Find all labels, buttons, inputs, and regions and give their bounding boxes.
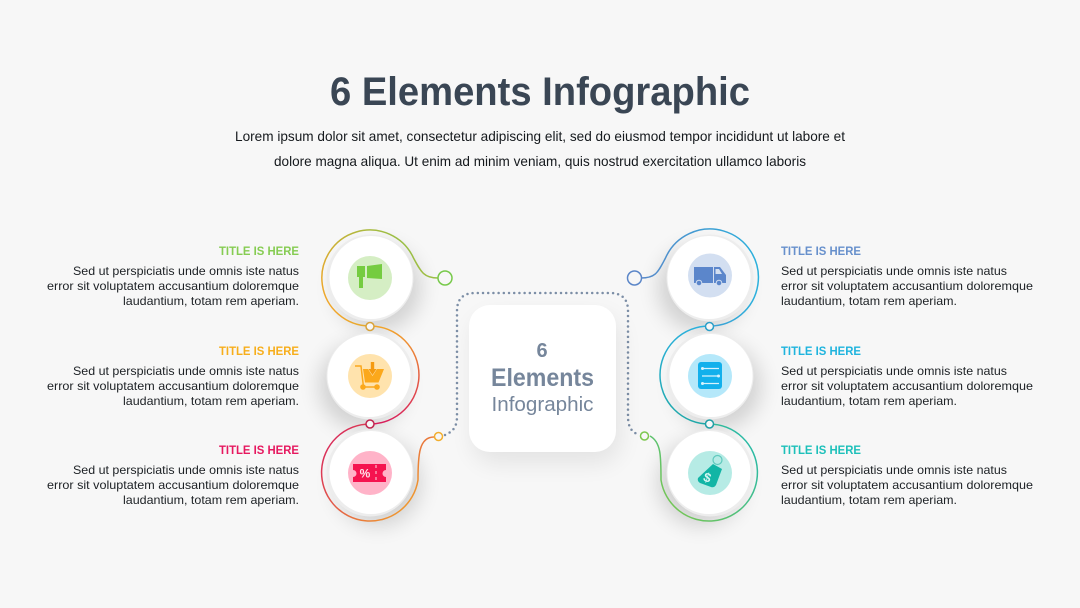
node: orange <box>434 432 442 440</box>
element 2 text: error sit voluptatem accusantium doloremque <box>47 379 299 393</box>
element 3 text: TITLE IS HERE <box>219 443 299 457</box>
element 3 text: laudantium, totam rem aperiam. <box>123 493 299 507</box>
panel: element 4 <box>659 234 1033 330</box>
element 2 text: TITLE IS HERE <box>219 344 299 358</box>
center card text <box>491 340 594 416</box>
element 3 text: error sit voluptatem accusantium doloremque <box>47 478 299 492</box>
element 4 text <box>781 244 1033 308</box>
element 2 circle <box>320 332 414 428</box>
element 4 text: TITLE IS HERE <box>781 244 861 258</box>
icon: list panel <box>698 362 722 389</box>
element 4 text: laudantium, totam rem aperiam. <box>781 294 957 308</box>
right connector line: blue <box>641 229 758 326</box>
element 1 text: Sed ut perspiciatis unde omnis iste natus <box>73 264 299 278</box>
icon: discount ticket: % <box>360 466 371 480</box>
icon: price tag: $ <box>702 469 714 486</box>
element 6 text: TITLE IS HERE <box>781 443 861 457</box>
element 5 circle <box>666 332 760 428</box>
right connector line: cyan to teal <box>660 326 709 424</box>
icon: megaphone <box>357 264 382 288</box>
center card text: Elements <box>491 364 594 392</box>
panel: element 1 <box>47 234 420 330</box>
node: crimson <box>366 420 374 428</box>
element 1 circle <box>326 234 420 330</box>
element 1 text: TITLE IS HERE <box>219 244 299 258</box>
subtitle text: Lorem ipsum dolor sit amet, consectetur adipiscing elit, sed do eiusmod tempor incididunt ut labore et <box>235 128 845 144</box>
element 3 text: Sed ut perspiciatis unde omnis iste natus <box>73 463 299 477</box>
element 6 text <box>781 443 1033 507</box>
panel: element 2 <box>47 332 414 428</box>
left connector line: red to orange <box>322 424 434 521</box>
element 6 text: Sed ut perspiciatis unde omnis iste natus <box>781 463 1007 477</box>
element 6 circle <box>659 430 754 525</box>
node: yellow-orange top <box>366 322 374 330</box>
node: light green <box>640 432 648 440</box>
element 3 text <box>47 443 299 507</box>
icon: delivery truck <box>694 267 726 286</box>
element 4 text: Sed ut perspiciatis unde omnis iste natus <box>781 264 1007 278</box>
panel: element 5 <box>666 332 1033 428</box>
icon: price tag <box>698 456 722 487</box>
left connector line: orange to red <box>370 326 419 424</box>
center card text: Infographic <box>492 394 594 416</box>
element 2 text: Sed ut perspiciatis unde omnis iste natus <box>73 364 299 378</box>
element 4 text: error sit voluptatem accusantium doloremque <box>781 279 1033 293</box>
element 5 text: error sit voluptatem accusantium doloremque <box>781 379 1033 393</box>
title: 6 Elements Infographic <box>330 70 750 114</box>
element 2 text: laudantium, totam rem aperiam. <box>123 394 299 408</box>
panel: element 3 <box>47 430 420 525</box>
element 5 text: laudantium, totam rem aperiam. <box>781 394 957 408</box>
element 1 text: laudantium, totam rem aperiam. <box>123 294 299 308</box>
element 5 text <box>781 344 1033 408</box>
node: teal <box>706 420 714 428</box>
element 2 text <box>47 344 299 408</box>
panel: element 6 <box>659 430 1033 525</box>
center card text: 6 <box>536 340 548 362</box>
element 1 text <box>47 244 299 308</box>
node: cyan <box>706 322 714 330</box>
dotted connector around center card <box>445 293 639 435</box>
element 4 circle <box>659 234 754 330</box>
subtitle text: dolore magna aliqua. Ut enim ad minim veniam, quis nostrud exercitation ullamco laboris <box>274 153 806 169</box>
center card <box>469 305 620 463</box>
icon: discount ticket <box>353 464 386 482</box>
element 1 text: error sit voluptatem accusantium doloremque <box>47 279 299 293</box>
node: green <box>438 271 452 285</box>
element 6 text: laudantium, totam rem aperiam. <box>781 493 957 507</box>
element 5 text: Sed ut perspiciatis unde omnis iste natus <box>781 364 1007 378</box>
right connector line: teal to green <box>650 424 757 521</box>
element 5 text: TITLE IS HERE <box>781 344 861 358</box>
element 3 circle <box>326 430 420 525</box>
node: blue <box>628 271 642 285</box>
element 6 text: error sit voluptatem accusantium doloremque <box>781 478 1033 492</box>
left connector line: green to orange <box>322 230 438 326</box>
icon: shopping cart <box>355 362 384 390</box>
subtitle text <box>235 128 845 169</box>
